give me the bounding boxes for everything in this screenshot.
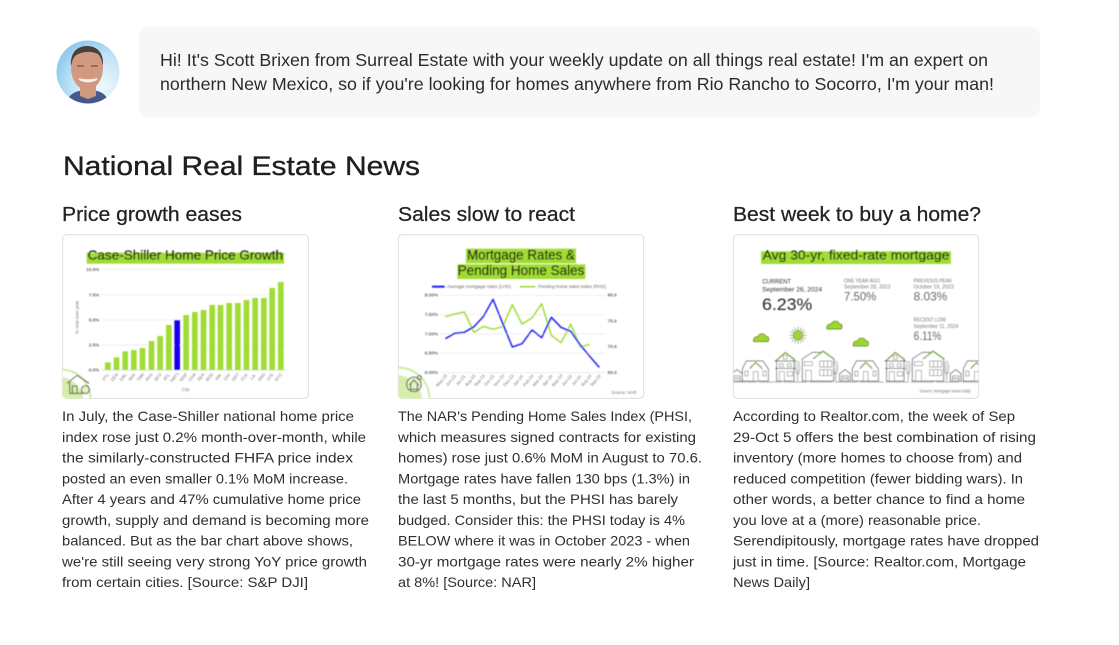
paragraph: Case-Shiller: balanced. But as the bar chart above shows,	[62, 532, 353, 548]
line chart card: Mortgage Rates and Pending Home Sales	[398, 234, 644, 399]
paragraph: Case-Shiller: index rose just 0.2% month-over-month, while	[62, 429, 366, 445]
rate stats card: Avg 30-yr fixed-rate mortgage: September 28, 2023	[844, 285, 890, 291]
line chart card: Mortgage Rates and Pending Home Sales: Jul-23	[455, 374, 467, 386]
line chart card: Mortgage Rates and Pending Home Sales: Sep-23	[473, 373, 486, 387]
paragraph: best week to buy: Serendipitously, mortgage rates have dropped	[733, 532, 1039, 548]
bar chart card: Case-Shiller Home Price Growth: 7.5%	[89, 292, 100, 297]
paragraph: Pending Home Sales: budged. Consider this: the PHSI today is 4%	[398, 512, 685, 528]
rate stats card: Avg 30-yr fixed-rate mortgage: 6.11%	[914, 329, 941, 343]
line chart card: Mortgage Rates and Pending Home Sales: 65.0	[608, 370, 617, 375]
paragraph: Case-Shiller: we're still seeing very strong YoY price growth	[61, 553, 367, 569]
line chart card: Mortgage Rates and Pending Home Sales: 75.0	[608, 318, 617, 323]
line chart card: Mortgage Rates and Pending Home Sales: 70.0	[608, 344, 617, 349]
line chart card: Mortgage Rates and Pending Home Sales: Pending home sales index (RHS)	[538, 284, 606, 289]
bar chart card: Case-Shiller Home Price Growth: DEN	[110, 372, 119, 382]
paragraph: Pending Home Sales: BELOW where it was in October 2023 - when	[398, 532, 690, 548]
paragraph: Case-Shiller: the similarly-constructed FHFA price index	[62, 450, 353, 466]
line chart card: Mortgage Rates and Pending Home Sales: Sep-24	[589, 373, 602, 387]
rate stats card: Avg 30-yr fixed-rate mortgage: PREVIOUS PEAK	[914, 278, 952, 284]
paragraph: Pending Home Sales: the last 5 months, but the PHSI has barely	[398, 491, 678, 507]
line chart card: Mortgage Rates and Pending Home Sales: 6.00%	[425, 370, 439, 375]
intro text: northern New Mexico, so if you're looking for homes anywhere from Rio Rancho to Socorro, I'm your man!	[160, 74, 994, 94]
bar chart card: Case-Shiller Home Price Growth: City	[182, 387, 190, 392]
paragraph: Pending Home Sales: 30-yr mortgage rates were nearly 2% higher	[398, 553, 694, 569]
paragraph: Case-Shiller	[61, 408, 369, 590]
bar chart card: Case-Shiller Home Price Growth: PTL	[101, 372, 111, 382]
paragraph: Pending Home Sales: Mortgage rates have fallen 130 bps (1.3%) in	[398, 470, 690, 486]
paragraph: best week to buy: just in time. [Source: Realtor.com, Mortgage	[732, 553, 1026, 569]
bar chart card: Case-Shiller Home Price Growth: SFO	[153, 372, 163, 382]
rate stats card: Avg 30-yr fixed-rate mortgage: September 26, 2024	[762, 287, 823, 293]
line chart card: Mortgage Rates and Pending Home Sales: May-24	[551, 373, 564, 388]
bar chart card: Case-Shiller Home Price Growth	[62, 234, 309, 399]
paragraph: best week to buy: reduced competition (fewer bidding wars). In	[733, 470, 1023, 486]
line chart card: Mortgage Rates and Pending Home Sales: 6.50%	[425, 351, 439, 356]
bar chart card: Case-Shiller Home Price Growth: CLE	[240, 372, 249, 382]
bar chart card: Case-Shiller Home Price Growth: 10.0%	[86, 267, 100, 272]
bar chart card: Case-Shiller Home Price Growth: 5.0%	[89, 318, 100, 323]
line chart card: Mortgage Rates and Pending Home Sales: Average mortgage rates (LHS)	[447, 284, 511, 289]
bar chart card: Case-Shiller Home Price Growth: BOS	[205, 372, 214, 382]
line chart card: Mortgage Rates and Pending Home Sales: Jan-24	[512, 373, 525, 387]
line chart card: Mortgage Rates and Pending Home Sales: Mar-24	[532, 373, 545, 387]
paragraph: Case-Shiller: growth, supply and demand is becoming more	[62, 512, 369, 528]
line chart card: Mortgage Rates and Pending Home Sales: Dec-23	[502, 373, 515, 387]
bar chart card: Case-Shiller Home Price Growth: LVS	[265, 372, 274, 382]
rate stats card: Avg 30-yr fixed-rate mortgage: 6.23%	[762, 295, 813, 314]
subheading: Price growth eases	[62, 203, 242, 226]
paragraph: Case-Shiller: After 4 years and 47% cumulative home price	[62, 491, 361, 507]
rate stats card: Avg 30-yr fixed-rate mortgage: Avg 30-yr, fixed-rate mortgage	[763, 247, 949, 262]
subheading: Best week to buy a home?	[733, 203, 981, 226]
avatar: Scott Brixen portrait	[56, 40, 120, 104]
rate stats card: Avg 30-yr fixed-rate mortgage: October 19, 2023	[914, 285, 954, 291]
paragraph: Case-Shiller: In July, the Case-Shiller national home price	[62, 408, 354, 424]
paragraph: Case-Shiller: from certain cities. [Source: S&P DJI]	[62, 574, 308, 590]
bar chart card: Case-Shiller Home Price Growth: DAL	[119, 372, 128, 382]
bar chart card: Case-Shiller Home Price Growth: TAM	[136, 372, 146, 382]
line chart card: Mortgage Rates and Pending Home Sales: Aug-24	[580, 373, 593, 387]
paragraph: Pending Home Sales: which measures signed contracts for existing	[397, 429, 696, 445]
rate stats card: Avg 30-yr fixed-rate mortgage: 8.03%	[914, 290, 947, 304]
paragraph: best week to buy: other words, a better chance to find a home	[733, 491, 1025, 507]
rate stats card: Avg 30-yr fixed-rate mortgage: RECENT LOW	[914, 317, 947, 323]
rate stats card: Avg 30-yr fixed-rate mortgage: CURRENT	[762, 279, 791, 285]
paragraph: Pending Home Sales: at 8%! [Source: NAR]	[398, 574, 536, 590]
bar chart card: Case-Shiller Home Price Growth: DET	[231, 372, 240, 382]
line chart card: Mortgage Rates and Pending Home Sales: Mortgage Rates &	[467, 247, 575, 262]
column: Price growth eases	[33, 203, 369, 590]
bar chart card: Case-Shiller Home Price Growth: CHI	[223, 373, 231, 382]
bar chart card: Case-Shiller Home Price Growth: % Year-over-year	[74, 300, 79, 334]
line chart card: Mortgage Rates and Pending Home Sales: Nov-23	[492, 373, 506, 387]
bar chart card: Case-Shiller Home Price Growth: NYC	[274, 372, 283, 382]
bar chart card: Case-Shiller Home Price Growth: PHX	[144, 372, 154, 382]
bar chart card: Case-Shiller Home Price Growth: 2.5%	[89, 343, 100, 348]
paragraph: Pending Home Sales: homes) rose just 0.6% MoM in August to 70.6.	[398, 450, 702, 466]
bar chart card: Case-Shiller Home Price Growth: LA	[249, 373, 257, 381]
rate stats card: Avg 30-yr fixed-rate mortgage: ONE YEAR AGO	[844, 278, 880, 284]
bar chart card: Case-Shiller Home Price Growth: 0.0%	[89, 368, 100, 373]
intro message bubble	[139, 27, 1040, 117]
line chart card: Mortgage Rates and Pending Home Sales: May-23	[435, 373, 448, 388]
intro text	[160, 50, 994, 94]
column: Sales slow to react	[398, 206, 701, 590]
bar chart card: Case-Shiller Home Price Growth: MSP	[179, 372, 189, 382]
line chart card: Mortgage Rates and Pending Home Sales: Apr-24	[541, 373, 554, 387]
paragraph: best week to buy: you love at a (more) reasonable price.	[733, 512, 981, 528]
paragraph: Pending Home Sales: The NAR's Pending Home Sales Index (PHSI,	[398, 408, 692, 424]
paragraph: best week to buy: inventory (more homes to choose from) and	[733, 450, 1022, 466]
bar chart card: Case-Shiller Home Price Growth: SND	[257, 372, 266, 382]
bar chart card: Case-Shiller Home Price Growth: SEA	[196, 372, 206, 382]
subheading: Sales slow to react	[398, 203, 575, 226]
paragraph: best week to buy	[732, 408, 1039, 590]
paragraph: Pending Home Sales	[397, 408, 702, 590]
line chart card: Mortgage Rates and Pending Home Sales: 7.00%	[425, 331, 439, 336]
line chart card: Mortgage Rates and Pending Home Sales: Feb-24	[522, 373, 535, 387]
line chart card: Mortgage Rates and Pending Home Sales: Oct-23	[483, 373, 496, 387]
line chart card: Mortgage Rates and Pending Home Sales: 7.50%	[425, 312, 439, 317]
rate stats card: Avg 30-yr fixed-rate mortgage: 7.50%	[844, 290, 876, 304]
paragraph: best week to buy: According to Realtor.com, the week of Sep	[733, 408, 1015, 424]
rate stats card: Avg 30-yr fixed-rate mortgage: Source: Mortgage News Daily	[920, 389, 971, 394]
bar chart card: Case-Shiller Home Price Growth: CHA	[187, 372, 197, 382]
line chart card: Mortgage Rates and Pending Home Sales: Jun-24	[561, 373, 573, 387]
intro text: Hi! It's Scott Brixen from Surreal Estate with your weekly update on all things real estate! I'm an expert on	[160, 50, 988, 70]
paragraph: Case-Shiller: posted an even smaller 0.1% MoM increase.	[62, 470, 348, 486]
main heading: National Real Estate News	[63, 151, 420, 181]
line chart card: Mortgage Rates and Pending Home Sales: Aug-23	[464, 373, 477, 387]
column: Best week to buy a home?	[732, 203, 1039, 590]
bar chart card: Case-Shiller Home Price Growth: WA	[214, 373, 222, 381]
line chart card: Mortgage Rates and Pending Home Sales: Pending Home Sales	[458, 263, 585, 278]
line chart card: Mortgage Rates and Pending Home Sales: Source: NAR	[611, 390, 637, 395]
rate stats card: Avg 30-yr fixed-rate mortgage	[732, 234, 980, 399]
paragraph: best week to buy: News Daily]	[733, 574, 810, 590]
line chart card: Mortgage Rates and Pending Home Sales: 80.0	[608, 293, 617, 298]
line chart card: Mortgage Rates and Pending Home Sales: Jun-23	[445, 373, 457, 387]
bar chart card: Case-Shiller Home Price Growth: MIA	[127, 372, 136, 382]
line chart card: Mortgage Rates and Pending Home Sales: Jul-24	[571, 374, 583, 386]
bar chart card: Case-Shiller Home Price Growth: ATL	[162, 372, 171, 382]
line chart card: Mortgage Rates and Pending Home Sales: 8.00%	[425, 293, 439, 298]
paragraph: best week to buy: 29-Oct 5 offers the best combination of rising	[733, 429, 1036, 445]
bar chart card: Case-Shiller Home Price Growth: Case-Shiller Home Price Growth	[88, 248, 283, 263]
bar chart card: Case-Shiller Home Price Growth: NAT'L	[169, 371, 181, 383]
rate stats card: Avg 30-yr fixed-rate mortgage: September 11, 2024	[914, 324, 958, 330]
